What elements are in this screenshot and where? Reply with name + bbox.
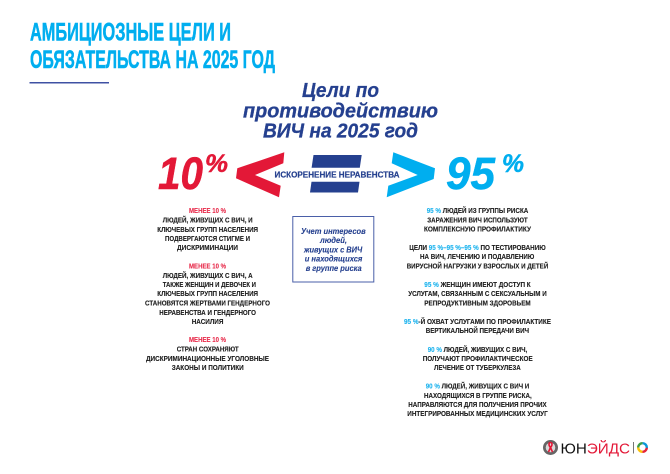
callout: people-centred box: людей,	[319, 236, 347, 245]
big number: 95 percent: 95	[446, 148, 496, 199]
text block: right targets: 90 % ЛЮДЕЙ, ЖИВУЩИХ С ВИЧ И	[426, 382, 529, 390]
text block: left targets: ТАКЖЕ ЖЕНЩИН И ДЕВОЧЕК И	[163, 282, 256, 289]
text block: right targets: НАХОДЯЩИХСЯ В ГРУППЕ РИСКА,	[424, 393, 532, 400]
text block: left targets	[145, 208, 270, 372]
logo: UNAIDS with SDG wheel	[543, 439, 647, 457]
text block: left targets: МЕНЕЕ 10 %	[189, 337, 227, 344]
title: ОБЯЗАТЕЛЬСТВА НА 2025 ГОД	[30, 46, 275, 74]
callout: people-centred box: Учет интересов	[301, 227, 366, 236]
text block: left targets: НАСИЛИЯ	[192, 319, 223, 326]
text block: right targets: УСЛУГАМ, СВЯЗАННЫМ С СЕКСУАЛЬНЫМ И	[408, 291, 547, 298]
text block: right targets	[404, 206, 551, 418]
callout: people-centred box: в группе риска	[306, 264, 362, 273]
text block: left targets: МЕНЕЕ 10 %	[189, 264, 227, 270]
text block: left targets: МЕНЕЕ 10 %	[189, 208, 227, 215]
text block: right targets: ПОЛУЧАЮТ ПРОФИЛАКТИЧЕСКОЕ	[423, 356, 533, 363]
big number: 10 percent: %	[205, 150, 228, 178]
text block: right targets: ЦЕЛИ 95 %–95 %–95 % ПО ТЕСТИРОВАНИЮ	[409, 245, 546, 252]
text block: right targets: ИНТЕГРИРОВАННЫХ МЕДИЦИНСКИХ УСЛУГ	[407, 411, 548, 418]
icon: blue greater-than sign	[387, 152, 435, 197]
text block: right targets: НАПРАВЛЯЮТСЯ ДЛЯ ПОЛУЧЕНИЯ ПРОЧИХ	[408, 402, 547, 409]
heading: goals: противодействию	[243, 100, 438, 122]
text block: right targets: ЗАРАЖЕНИЯ ВИЧ ИСПОЛЬЗУЮТ	[427, 218, 528, 224]
big number: 95 percent	[446, 148, 524, 199]
text block: left targets: ЛЮДЕЙ, ЖИВУЩИХ С ВИЧ, И	[163, 216, 253, 224]
heading: goals: Цели по	[302, 79, 379, 102]
text block: right targets: ЛЕЧЕНИЕ ОТ ТУБЕРКУЛЕЗА	[434, 365, 521, 372]
text block: right targets: ВИРУСНОЙ НАГРУЗКИ У ВЗРОСЛЫХ И ДЕТЕЙ	[407, 262, 548, 270]
text block: right targets: РЕПРОДУКТИВНЫМ ЗДОРОВЬЕМ	[424, 300, 531, 308]
text block: right targets: ВЕРТИКАЛЬНОЙ ПЕРЕДАЧИ ВИЧ	[426, 326, 529, 335]
callout: people-centred box: живущих с ВИЧ	[303, 245, 363, 254]
text block: left targets: КЛЮЧЕВЫХ ГРУПП НАСЕЛЕНИЯ	[157, 291, 258, 298]
heading: goals	[243, 79, 438, 142]
text block: left targets: НЕРАВЕНСТВА И ГЕНДЕРНОГО	[159, 310, 256, 317]
text block: right targets: 95 % ЛЮДЕЙ ИЗ ГРУППЫ РИСКА	[427, 206, 528, 215]
text block: left targets: СТРАН СОХРАНЯЮТ	[177, 346, 239, 354]
title: АМБИЦИОЗНЫЕ ЦЕЛИ И	[30, 18, 231, 46]
text block: left targets: ПОДВЕРГАЮТСЯ СТИГМЕ И	[165, 236, 250, 243]
text block: right targets: 95 %-Й ОХВАТ УСЛУГАМИ ПО ПРОФИЛАКТИКЕ	[404, 317, 551, 326]
heading: goals: ВИЧ на 2025 год	[263, 120, 418, 142]
text block: left targets: ДИСКРИМИНАЦИИ	[177, 245, 238, 252]
callout: people-centred box: и находящихся	[305, 255, 363, 264]
icon: equals sign with label	[274, 155, 400, 192]
text block: left targets: СТАНОВЯТСЯ ЖЕРТВАМИ ГЕНДЕРНОГО	[145, 300, 270, 308]
big number: 95 percent: %	[502, 150, 524, 178]
title	[30, 18, 275, 74]
text block: right targets: 95 % ЖЕНЩИН ИМЕЮТ ДОСТУП К	[424, 282, 531, 289]
logo: UNAIDS with SDG wheel: ЮНЭЙДС	[560, 439, 630, 457]
text block: left targets: ЗАКОНЫ И ПОЛИТИКИ	[172, 365, 244, 372]
text block: right targets: НА ВИЧ, ЛЕЧЕНИЮ И ПОДАВЛЕНИЮ	[420, 254, 534, 261]
text block: right targets: 90 % ЛЮДЕЙ, ЖИВУЩИХ С ВИЧ,	[428, 345, 527, 354]
big number: 10 percent: 10	[158, 148, 203, 199]
callout: people-centred box	[293, 216, 374, 282]
text block: left targets: ЛЮДЕЙ, ЖИВУЩИХ С ВИЧ, А	[163, 271, 253, 280]
text block: left targets: КЛЮЧЕВЫХ ГРУПП НАСЕЛЕНИЯ	[157, 227, 258, 234]
text block: right targets: КОМПЛЕКСНУЮ ПРОФИЛАКТИКУ	[424, 226, 532, 234]
icon: red less-than sign	[236, 152, 284, 197]
text block: left targets: ДИСКРИМИНАЦИОННЫЕ УГОЛОВНЫЕ	[146, 356, 269, 363]
icon: equals sign with label: ИСКОРЕНЕНИЕ НЕРАВЕНСТВА	[274, 169, 400, 179]
